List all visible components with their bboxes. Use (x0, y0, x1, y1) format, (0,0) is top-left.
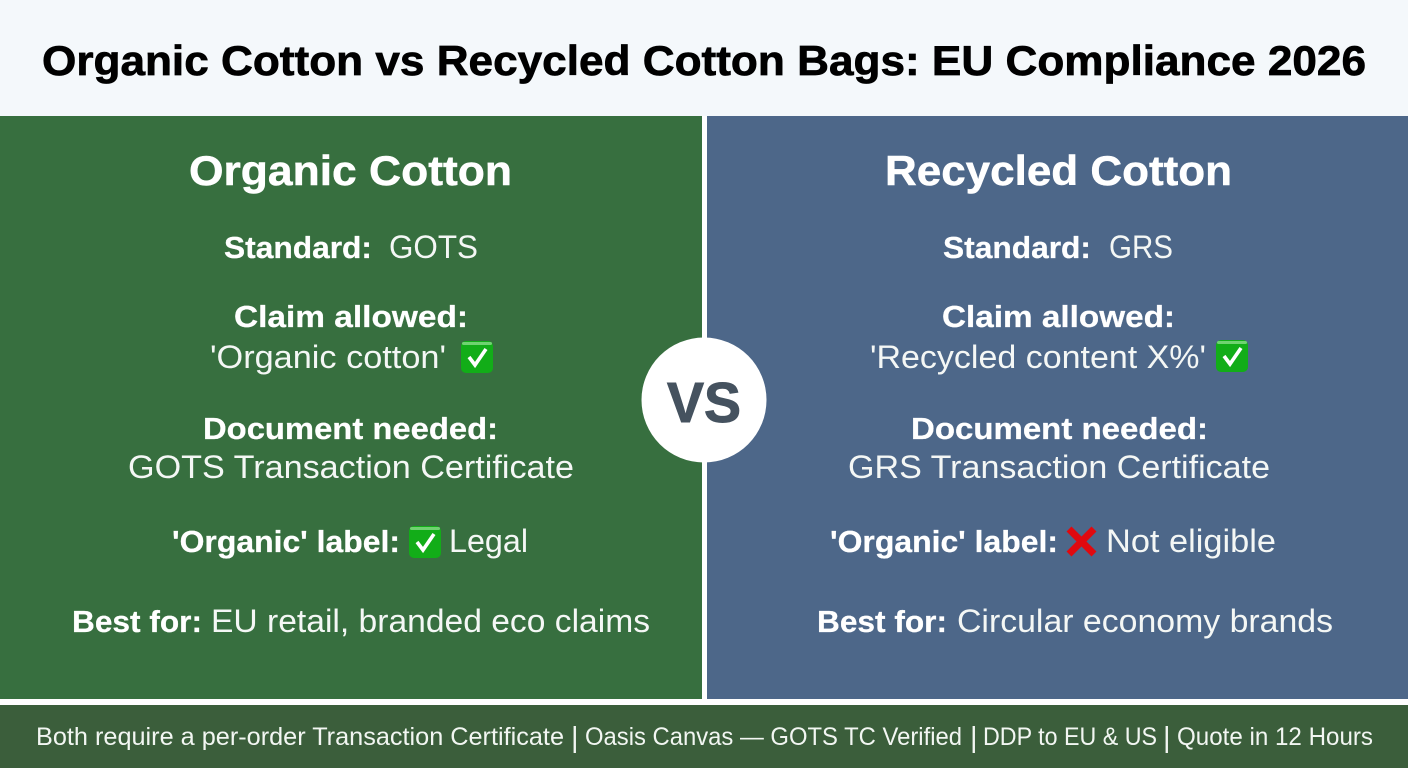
footer text: Quote in 12 Hours (1177, 723, 1373, 751)
row: claim allowed: 'Recycled content X%' (870, 339, 1206, 375)
row: claim allowed: 'Organic cotton' (210, 339, 446, 375)
row: organic label: 'Organic' label: (172, 524, 400, 559)
row: organic label: Not eligible (1106, 523, 1276, 559)
row: document needed: Document needed: (203, 411, 498, 446)
vs badge: VS (667, 371, 741, 435)
row: organic label (172, 523, 528, 559)
row: claim allowed: Claim allowed: (234, 299, 468, 334)
row: document needed: Document needed: (911, 411, 1208, 446)
row: document needed: GRS Transaction Certificate (848, 449, 1270, 485)
row: claim allowed (870, 299, 1248, 375)
row: document needed (848, 411, 1270, 485)
footer text: Oasis Canvas — GOTS TC Verified (585, 723, 962, 751)
row: standard (224, 229, 478, 265)
row: claim allowed (210, 299, 493, 375)
footer text: DDP to EU & US (983, 723, 1157, 751)
footer band (0, 705, 1408, 768)
row: best for: Best for: (817, 604, 947, 639)
footer text: | (1163, 722, 1171, 754)
row: document needed (128, 411, 574, 485)
row: best for: Circular economy brands (957, 603, 1333, 639)
row: claim allowed: Claim allowed: (942, 299, 1175, 334)
row: standard (943, 229, 1173, 265)
header band (0, 0, 1408, 116)
title: Organic Cotton vs Recycled Cotton Bags: EU Compliance 2026 (42, 37, 1366, 84)
panel: organic cotton (0, 116, 702, 699)
footer text: | (970, 722, 978, 754)
footer text: | (571, 722, 579, 754)
row: standard: Standard: (943, 230, 1091, 265)
heading: recycled cotton: Recycled Cotton (885, 147, 1232, 194)
row: best for: EU retail, branded eco claims (211, 603, 650, 639)
row: best for: Best for: (72, 604, 202, 639)
row: organic label: Legal (449, 523, 528, 559)
vs badge (642, 338, 766, 462)
row: document needed: GOTS Transaction Certificate (128, 449, 574, 485)
heading: organic cotton: Organic Cotton (189, 147, 512, 194)
row: best for (817, 603, 1333, 639)
footer text (36, 722, 1373, 754)
row: standard: GRS (1109, 229, 1173, 265)
row: organic label (830, 523, 1276, 559)
row: standard: GOTS (389, 229, 478, 265)
footer text: Both require a per-order Transaction Certificate (36, 723, 564, 751)
row: organic label: 'Organic' label: (830, 524, 1058, 559)
row: standard: Standard: (224, 230, 372, 265)
panel: recycled cotton (707, 116, 1408, 699)
